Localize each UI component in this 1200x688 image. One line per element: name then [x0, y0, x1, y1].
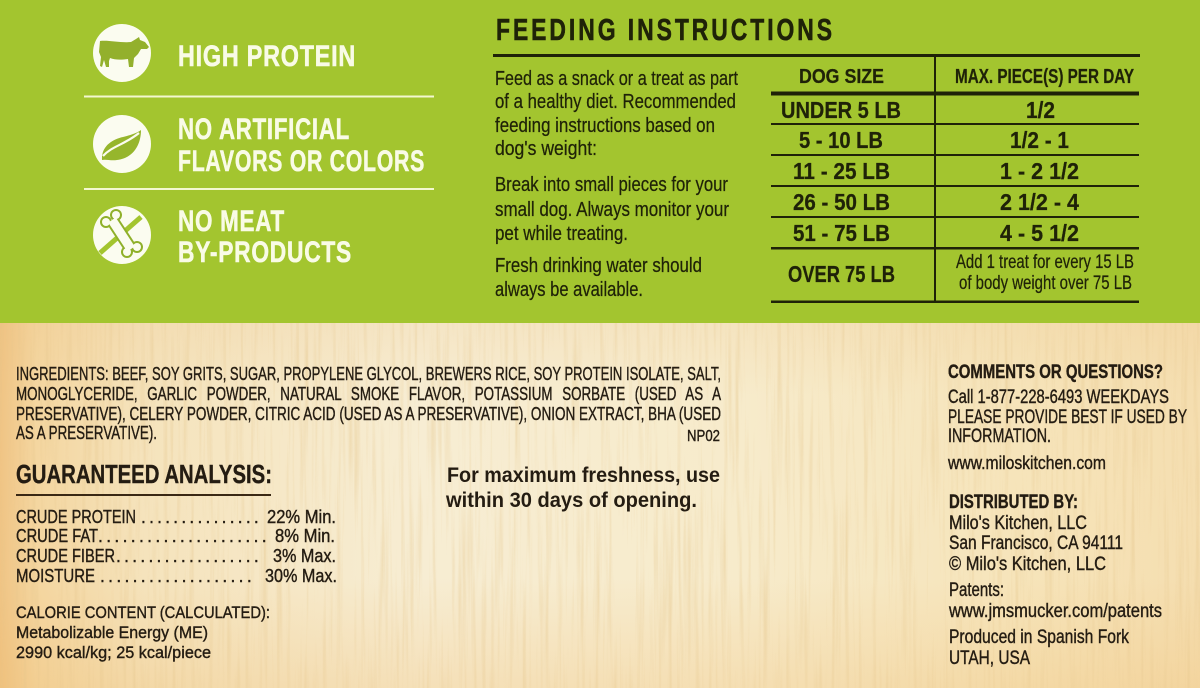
text block: comments or questions: [947, 362, 1187, 473]
text block: ingredients: AS A PRESERVATIVE).: [16, 423, 157, 443]
panel: feeding instructions: [493, 12, 1140, 303]
panel: contact and distributor: [947, 362, 1187, 669]
analysis row: crude fiber: 3% Max.: [273, 545, 336, 566]
table row: 11-25 lb: 1 - 2 1/2: [1000, 158, 1079, 184]
text block: ingredients: PRESERVATIVE), CELERY POWDER, CITRIC ACID (USED AS A PRESERVATIVE), ONION EXTRACT, BHA (USED: [16, 404, 721, 424]
table row: 51-75 lb: 4 - 5 1/2: [1000, 220, 1079, 246]
text block: feeding guidance: dog's weight:: [495, 138, 597, 160]
text block: feeding guidance: Break into small pieces for your: [495, 174, 728, 196]
table row: 11-25 lb: 11 - 25 LB: [793, 158, 890, 184]
text block: feeding guidance: of a healthy diet. Recommended: [495, 91, 736, 113]
text block: ingredients: [16, 364, 721, 445]
table: dog size and daily pieces: [493, 54, 1140, 303]
table row: 26-50 lb: [793, 189, 1079, 215]
divider line: claims 1: [84, 96, 434, 98]
text block: calorie content: 2990 kcal/kg; 25 kcal/piece: [16, 643, 211, 662]
text block: patents: [948, 580, 1162, 622]
table row: 5-10 lb: 1/2 - 1: [1010, 127, 1069, 153]
icon: crossed bone: [93, 206, 151, 264]
analysis row: moisture: ...................: [100, 565, 255, 586]
table header row: [799, 66, 1134, 88]
claim: no artificial flavors: FLAVORS OR COLORS: [178, 145, 425, 178]
table row: under 5 lb: UNDER 5 LB: [781, 97, 901, 123]
claim: no meat by-products: [93, 205, 352, 269]
claim: high protein: [93, 24, 356, 82]
panel: green header band: [0, 0, 1200, 323]
table header row: DOG SIZE: [799, 66, 884, 88]
analysis row: crude fat: [16, 525, 335, 546]
text block: feeding guidance: Fresh drinking water should: [495, 255, 702, 277]
text block: ingredients: NP02: [687, 428, 720, 445]
table row: over 75 lb: OVER 75 LB: [788, 261, 895, 287]
divider line: claims 2: [84, 188, 434, 190]
table row: 11-25 lb: [793, 158, 1079, 184]
icon: leaf: [93, 115, 151, 173]
table row: 26-50 lb: 2 1/2 - 4: [1000, 189, 1079, 215]
table row: 51-75 lb: 51 - 75 LB: [793, 220, 890, 246]
text block: ingredients: INGREDIENTS: BEEF, SOY GRITS, SUGAR, PROPYLENE GLYCOL, BREWERS RICE, SOY PROTEIN ISOLATE, SALT,: [16, 364, 721, 384]
text block: feeding guidance: pet while treating.: [495, 223, 628, 245]
text block: calorie content: CALORIE CONTENT (CALCULATED):: [16, 603, 270, 622]
panel: wood background: [0, 322, 1200, 688]
text block: comments or questions: INFORMATION.: [948, 426, 1051, 447]
text block: ingredients: MONOGLYCERIDE, GARLIC POWDER, NATURAL SMOKE FLAVOR, POTASSIUM SORBATE (USED AS A: [16, 384, 721, 404]
text block: calorie content: [16, 603, 270, 662]
table row: under 5 lb: [781, 97, 1055, 123]
analysis row: moisture: MOISTURE: [16, 565, 95, 586]
text block: feeding guidance: [495, 68, 738, 301]
analysis row: crude protein: [16, 506, 336, 527]
claim: no meat by-products: BY-PRODUCTS: [178, 236, 352, 269]
claim: high protein: HIGH PROTEIN: [178, 40, 356, 73]
analysis row: crude protein: CRUDE PROTEIN: [16, 506, 136, 527]
text block: comments or questions: www.miloskitchen.com: [947, 453, 1106, 473]
analysis row: moisture: 30% Max.: [265, 565, 337, 586]
claim: no meat by-products: NO MEAT: [178, 205, 285, 238]
panel: guaranteed analysis: [16, 459, 337, 586]
text block: distributed by: San Francisco, CA 94111: [949, 533, 1123, 554]
analysis row: crude protein: 22% Min.: [267, 506, 336, 527]
text block: feeding guidance: always be available.: [495, 279, 643, 301]
text block: feeding guidance: Feed as a snack or a treat as part: [495, 68, 738, 90]
text block: feeding guidance: feeding instructions based on: [495, 115, 715, 137]
callout: freshness note: within 30 days of opening.: [445, 489, 697, 512]
text block: place of production: Produced in Spanish Fork: [949, 627, 1129, 648]
table row: 5-10 lb: [799, 127, 1069, 153]
text block: patents: Patents:: [949, 580, 1004, 601]
panel: product claims: [84, 24, 434, 269]
claim: no artificial flavors: NO ARTIFICIAL: [178, 113, 350, 146]
text block: distributed by: © Milo's Kitchen, LLC: [949, 554, 1106, 575]
text block: place of production: UTAH, USA: [949, 648, 1030, 669]
table row: 51-75 lb: [793, 220, 1079, 246]
heading: guaranteed analysis: GUARANTEED ANALYSIS:: [16, 459, 272, 489]
callout: freshness note: [445, 464, 720, 512]
text block: place of production: [949, 627, 1129, 669]
text block: distributed by: [949, 492, 1123, 575]
table row: 26-50 lb: 26 - 50 LB: [793, 189, 890, 215]
analysis row: crude fat: .....................: [98, 525, 270, 546]
callout: freshness note: For maximum freshness, use: [447, 464, 720, 487]
table header row: MAX. PIECE(S) PER DAY: [955, 66, 1134, 88]
analysis row: crude fat: CRUDE FAT: [16, 525, 98, 546]
table row: over 75 lb: Add 1 treat for every 15 LB: [956, 251, 1134, 273]
analysis row: crude protein: ...............: [141, 506, 262, 527]
text block: feeding guidance: small dog. Always monitor your: [495, 199, 729, 221]
analysis row: crude fat: 8% Min.: [275, 525, 335, 546]
text block: distributed by: DISTRIBUTED BY:: [949, 492, 1078, 513]
table row: over 75 lb: of body weight over 75 LB: [959, 272, 1132, 294]
table row: under 5 lb: 1/2: [1026, 97, 1055, 123]
analysis row: crude fiber: [16, 545, 336, 566]
heading: feeding instructions: FEEDING INSTRUCTIONS: [496, 12, 835, 47]
text block: distributed by: Milo's Kitchen, LLC: [949, 513, 1087, 534]
table row: over 75 lb: [788, 251, 1134, 294]
text block: calorie content: Metabolizable Energy (ME): [16, 623, 208, 642]
analysis row: moisture: [16, 565, 337, 586]
icon: cow: [93, 24, 151, 82]
claim: no artificial flavors: [93, 113, 425, 178]
table row: 5-10 lb: 5 - 10 LB: [799, 127, 883, 153]
analysis row: crude fiber: ..................: [116, 545, 262, 566]
analysis row: crude fiber: CRUDE FIBER: [16, 545, 115, 566]
text block: patents: www.jmsmucker.com/patents: [948, 601, 1162, 622]
